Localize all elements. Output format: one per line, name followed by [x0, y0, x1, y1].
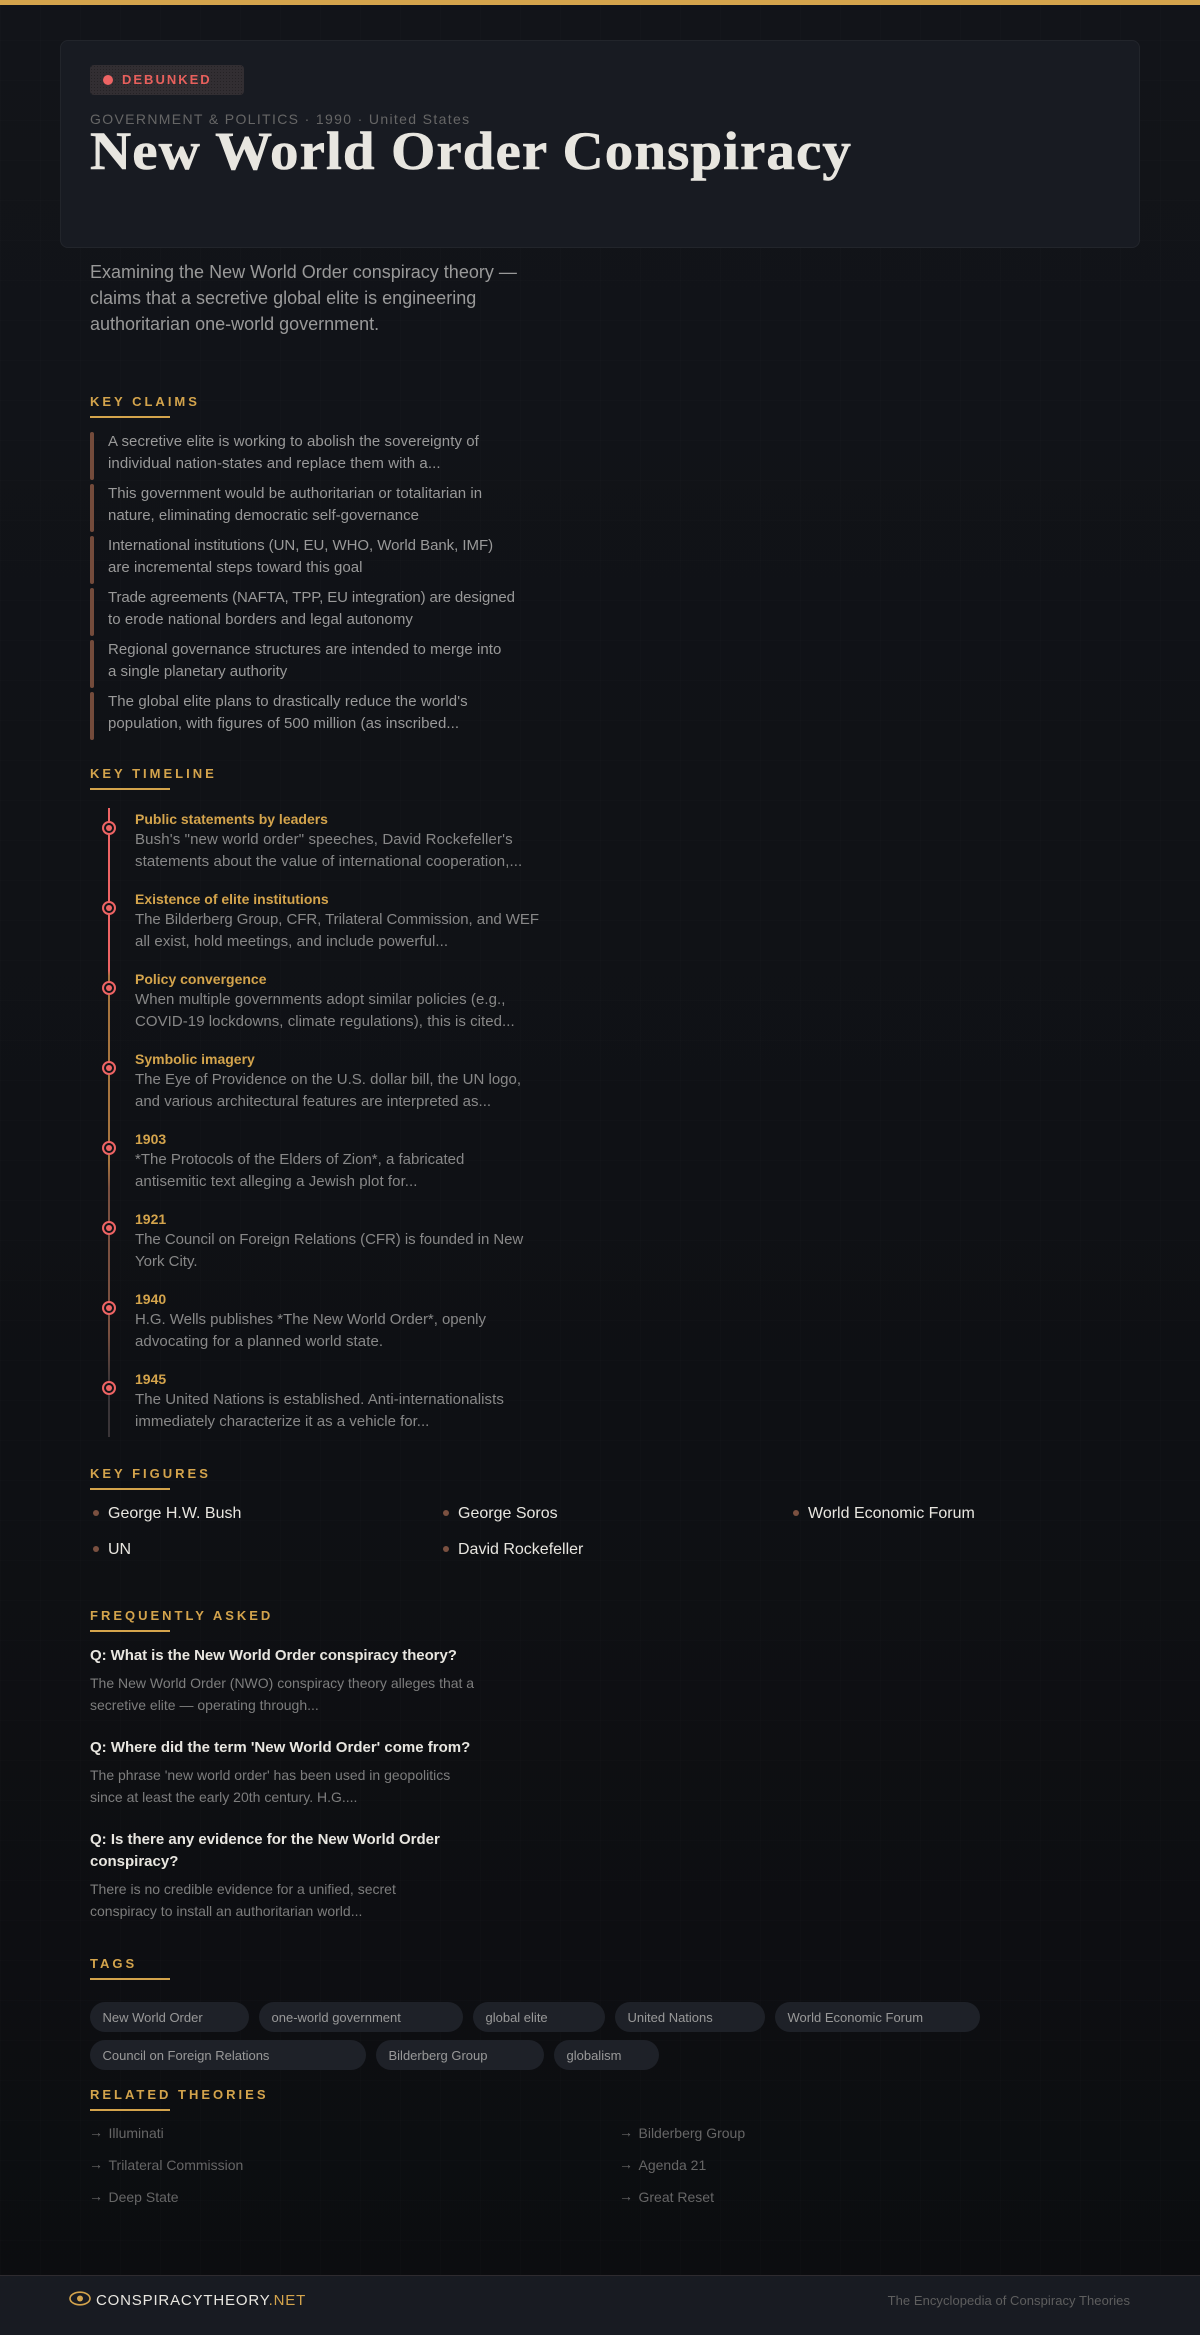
claim 1: individual nation-states and replace them with a...: [108, 455, 441, 472]
timeline item: 1903: *The Protocols of the Elders of Zion*, a fabricated: [135, 1151, 464, 1168]
claim 1: A secretive elite is working to abolish the sovereignty of: [108, 433, 479, 450]
timeline item: public statements: Bush's "new world order" speeches, David Rockefeller's: [135, 831, 513, 848]
footer tagline: The Encyclopedia of Conspiracy Theories: [888, 2293, 1130, 2308]
heading: tags: TAGS: [90, 1956, 137, 1971]
category and date line: GOVERNMENT & POLITICS · 1990 · United States: [90, 111, 470, 127]
claim 2: This government would be authoritarian or totalitarian in: [108, 485, 482, 502]
timeline item: 1940: [102, 1291, 486, 1350]
tag: Bilderberg Group: [388, 2048, 488, 2063]
related link: →: [619, 2188, 633, 2204]
heading: frequently asked: FREQUENTLY ASKED: [90, 1608, 273, 1623]
related link: →: [89, 2156, 103, 2172]
related link: →: [619, 2156, 633, 2172]
faq 3: conspiracy to install an authoritarian world...: [90, 1903, 362, 1919]
badge label: DEBUNKED: [122, 72, 212, 87]
faq 2: Q: Where did the term 'New World Order' come from?: [90, 1739, 470, 1756]
tag: [615, 2002, 765, 2032]
top accent bar: [0, 0, 1200, 5]
tag: [775, 2002, 980, 2032]
timeline item: 1940: H.G. Wells publishes *The New World Order*, openly: [135, 1311, 486, 1328]
timeline item: 1945: immediately characterize it as a vehicle for...: [135, 1413, 429, 1430]
timeline item: public statements: statements about the value of international cooperation,...: [135, 853, 522, 870]
timeline item: 1921: [102, 1211, 524, 1270]
claim 3: International institutions (UN, EU, WHO, World Bank, IMF): [108, 537, 493, 554]
related link: Illuminati: [108, 2125, 164, 2141]
timeline item: symbolic imagery: and various architectural features are interpreted as...: [135, 1093, 491, 1110]
timeline item: policy convergence: COVID-19 lockdowns, climate regulations), this is cited...: [135, 1013, 515, 1030]
faq 1: secretive elite — operating through...: [90, 1697, 319, 1713]
section: key timeline: [90, 766, 539, 1437]
timeline item: 1940: 1940: [135, 1291, 166, 1307]
subtitle: [90, 262, 517, 334]
tag: [376, 2040, 544, 2070]
tag: [259, 2002, 463, 2032]
logo text: CONSPIRACYTHEORY.NET: [96, 2292, 306, 2309]
timeline item: 1945: [102, 1371, 504, 1430]
figure: George Soros: George Soros: [458, 1505, 558, 1522]
related link: Deep State: [108, 2189, 179, 2205]
claim 5: a single planetary authority: [108, 663, 287, 680]
related link: [89, 2124, 164, 2141]
faq 3: [90, 1831, 440, 1919]
subtitle: claims that a secretive global elite is engineering: [90, 288, 476, 308]
timeline item: elite institutions: The Bilderberg Group, CFR, Trilateral Commission, and WEF: [135, 911, 539, 928]
figure: George H.W. Bush: George H.W. Bush: [108, 1505, 241, 1522]
faq 3: conspiracy?: [90, 1853, 178, 1870]
timeline item: public statements: [102, 811, 522, 870]
timeline item: 1921: The Council on Foreign Relations (CFR) is founded in New: [135, 1231, 523, 1248]
timeline item: public statements: Public statements by leaders: [135, 811, 328, 827]
tag: Council on Foreign Relations: [102, 2048, 269, 2063]
faq 2: since at least the early 20th century. H.G....: [90, 1789, 357, 1805]
title: New World Order Conspiracy: [90, 121, 852, 181]
timeline item: elite institutions: Existence of elite institutions: [135, 891, 329, 907]
timeline item: symbolic imagery: Symbolic imagery: [135, 1051, 255, 1067]
tag: World Economic Forum: [788, 2010, 923, 2025]
subtitle: Examining the New World Order conspiracy theory —: [90, 262, 517, 282]
figure: David Rockefeller: David Rockefeller: [458, 1541, 583, 1558]
icon: eye logo: [69, 2291, 91, 2306]
tag: global elite: [486, 2010, 548, 2025]
timeline item: 1945: The United Nations is established. Anti-internationalists: [135, 1391, 504, 1408]
section: related theories: [89, 2087, 745, 2205]
related link: →: [89, 2188, 103, 2204]
related link: Agenda 21: [638, 2157, 706, 2173]
timeline item: elite institutions: all exist, hold meetings, and include powerful...: [135, 933, 448, 950]
related link: Trilateral Commission: [108, 2157, 243, 2173]
claim 4: [90, 588, 515, 636]
claim 5: [90, 640, 501, 688]
faq 1: [90, 1647, 474, 1713]
claim 5: Regional governance structures are intended to merge into: [108, 641, 501, 658]
section: frequently asked: [90, 1608, 474, 1919]
footer: [0, 2275, 1200, 2335]
timeline item: elite institutions: [102, 891, 539, 950]
timeline item: 1903: [102, 1131, 464, 1190]
tag: one-world government: [272, 2010, 401, 2025]
related link: →: [619, 2124, 633, 2140]
claim 6: The global elite plans to drastically reduce the world's: [108, 693, 468, 710]
claim 4: to erode national borders and legal autonomy: [108, 611, 413, 628]
timeline item: 1921: York City.: [135, 1253, 198, 1270]
claim 3: are incremental steps toward this goal: [108, 559, 363, 576]
faq 3: Q: Is there any evidence for the New World Order: [90, 1831, 440, 1848]
panel: header: [60, 40, 1140, 248]
figure: UN: [93, 1541, 131, 1558]
claim 2: nature, eliminating democratic self-governance: [108, 507, 419, 524]
figure: World Economic Forum: World Economic Forum: [808, 1505, 975, 1522]
timeline item: policy convergence: Policy convergence: [135, 971, 267, 987]
related link: Great Reset: [638, 2189, 714, 2205]
tag: New World Order: [102, 2010, 203, 2025]
claim 6: [90, 692, 468, 740]
subtitle: authoritarian one-world government.: [90, 314, 379, 334]
section: key figures: [90, 1466, 975, 1558]
timeline item: symbolic imagery: The Eye of Providence on the U.S. dollar bill, the UN logo,: [135, 1071, 521, 1088]
timeline item: symbolic imagery: [102, 1051, 521, 1110]
status badge: debunked: [90, 65, 244, 95]
faq 1: Q: What is the New World Order conspiracy theory?: [90, 1647, 457, 1664]
related link: Bilderberg Group: [638, 2125, 745, 2141]
timeline axis: [108, 808, 110, 1437]
heading: key figures: KEY FIGURES: [90, 1466, 211, 1481]
tag: [90, 2040, 366, 2070]
tag: [554, 2040, 659, 2070]
faq 3: There is no credible evidence for a unified, secret: [90, 1881, 396, 1897]
claim 4: Trade agreements (NAFTA, TPP, EU integration) are designed: [108, 589, 515, 606]
claim 1: [90, 432, 479, 480]
faq 2: [90, 1739, 470, 1805]
claim 3: [90, 536, 493, 584]
timeline item: 1945: 1945: [135, 1371, 166, 1387]
claim 6: population, with figures of 500 million (as inscribed...: [108, 715, 459, 732]
timeline item: policy convergence: [102, 971, 515, 1030]
timeline item: 1903: 1903: [135, 1131, 166, 1147]
figure: UN: UN: [108, 1541, 131, 1558]
section: tags: [90, 1956, 980, 2070]
tag: globalism: [566, 2048, 621, 2063]
claim 2: [90, 484, 482, 532]
timeline item: policy convergence: When multiple governments adopt similar policies (e.g.,: [135, 991, 505, 1008]
heading: key claims: KEY CLAIMS: [90, 394, 200, 409]
timeline item: 1940: advocating for a planned world state.: [135, 1333, 383, 1350]
timeline item: 1921: 1921: [135, 1211, 166, 1227]
tag: [473, 2002, 605, 2032]
related link: →: [89, 2124, 103, 2140]
heading: related theories: RELATED THEORIES: [90, 2087, 268, 2102]
faq 2: The phrase 'new world order' has been used in geopolitics: [90, 1767, 450, 1783]
heading: key timeline: KEY TIMELINE: [90, 766, 217, 781]
section: key claims: [90, 394, 515, 740]
tag: [90, 2002, 249, 2032]
icon: status dot: [103, 75, 113, 85]
tag: United Nations: [628, 2010, 713, 2025]
timeline item: 1903: antisemitic text alleging a Jewish plot for...: [135, 1173, 418, 1190]
faq 1: The New World Order (NWO) conspiracy theory alleges that a: [90, 1675, 474, 1691]
